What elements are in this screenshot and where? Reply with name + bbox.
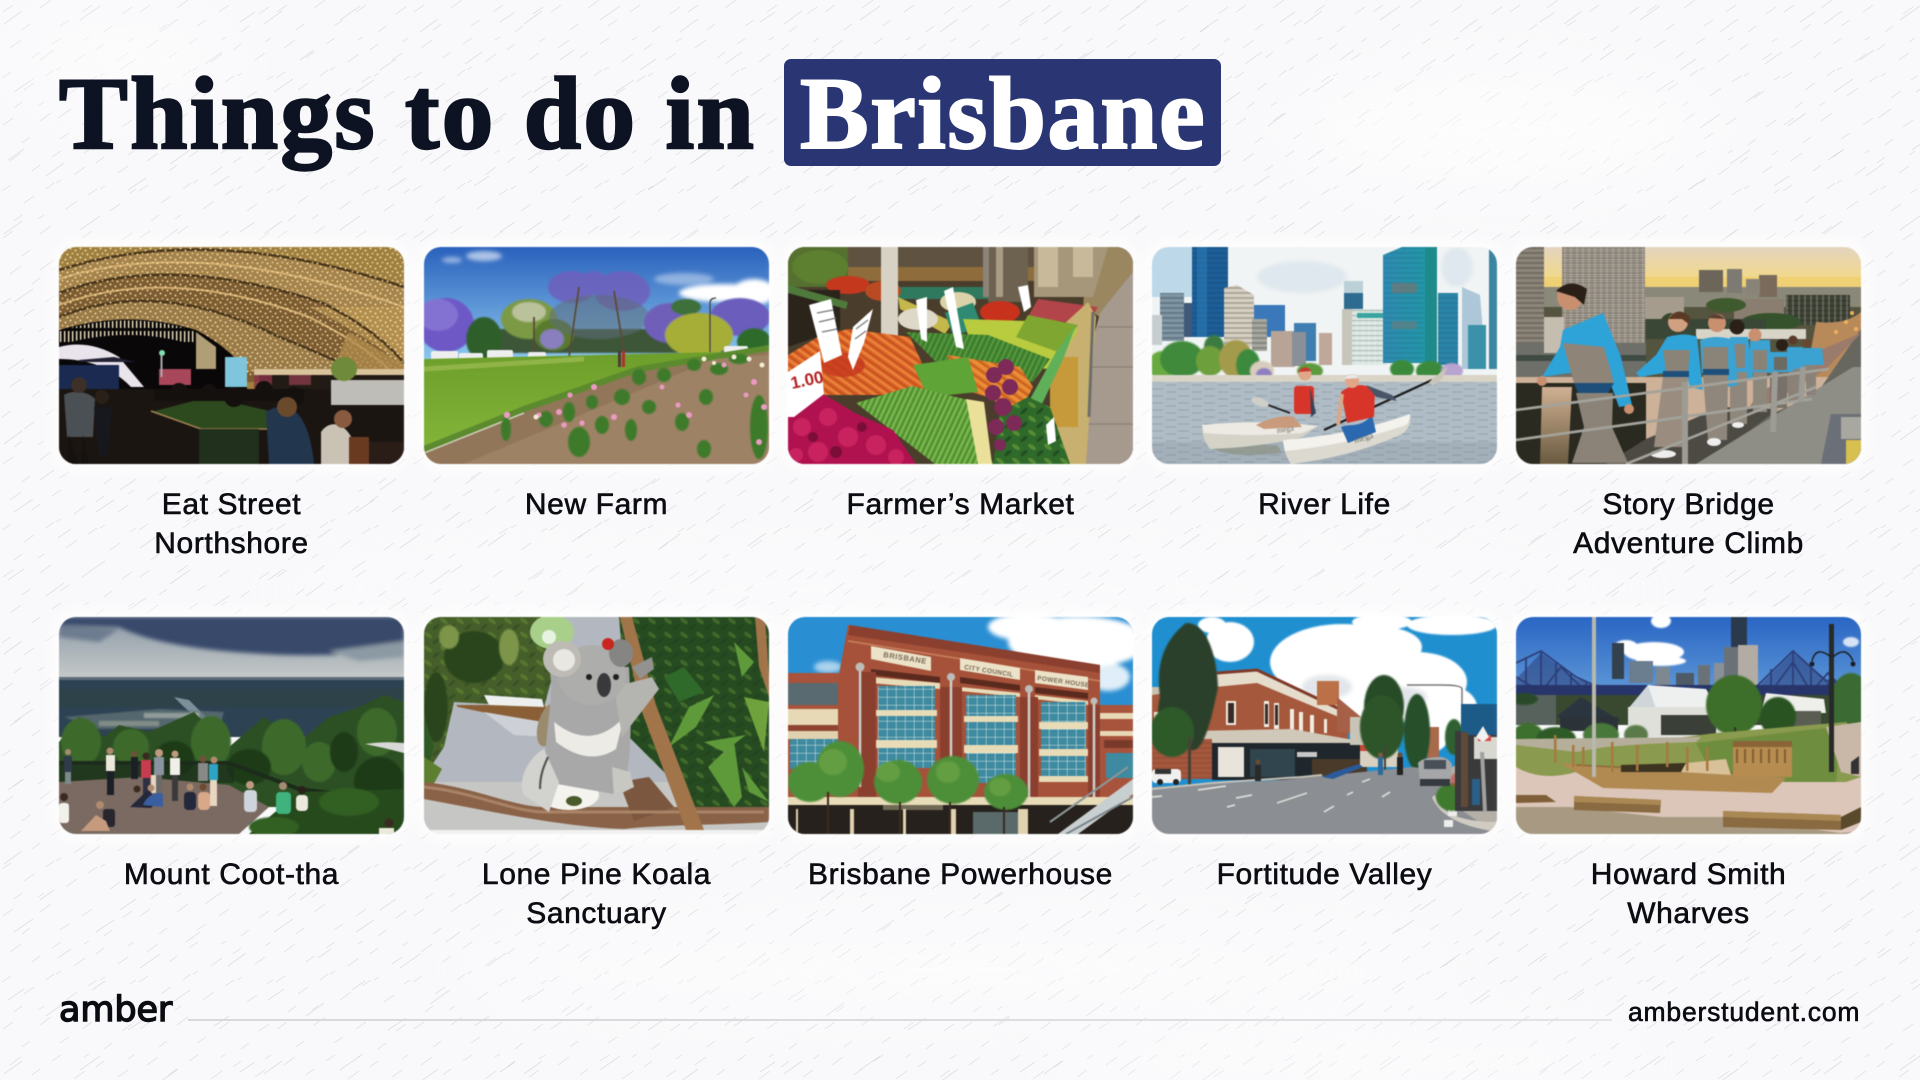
title (59, 57, 1221, 172)
panel: Eat Street Northshore (48, 236, 412, 560)
label: Howard Smith (1591, 858, 1786, 891)
photo: koala on a branch (424, 617, 769, 834)
photo: kayakers on Brisbane river with skyline (1152, 247, 1497, 464)
label: Adventure Climb (1573, 526, 1804, 560)
photo: New Farm park with jacarandas and roses (424, 247, 769, 464)
label: Farmer’s Market (847, 488, 1074, 521)
bridge truss (1516, 651, 1861, 695)
photo: kayakers on Brisbane river with skyline: mega (1353, 430, 1374, 445)
photo: Eat Street lit arches at night (59, 247, 404, 464)
label: Lone Pine Koala (482, 858, 711, 891)
footer logo: amber: amber (59, 990, 172, 1030)
photo: lookout over Brisbane from Mount Coot-tha (59, 617, 404, 834)
panel: Farmer's Market (779, 236, 1142, 521)
panel: Story Bridge Adventure Climb (1508, 235, 1872, 560)
footer website: amberstudent.com (1628, 997, 1860, 1027)
label (1591, 858, 1786, 930)
panel: Lone Pine Koala Sanctuary (415, 608, 778, 930)
photo: brick Powerhouse building: POWER HOUSE (1037, 675, 1090, 689)
label: Wharves (1627, 896, 1750, 930)
panel: Brisbane Powerhouse (779, 608, 1142, 891)
label: Brisbane Powerhouse (808, 858, 1113, 891)
photo: kayakers on Brisbane river with skyline: mega (1276, 424, 1295, 435)
label: River Life (1258, 488, 1391, 521)
photo: fresh produce market stall: 1.00 (789, 367, 825, 393)
label: Fortitude Valley (1217, 858, 1432, 891)
photo: Howard Smith Wharves park with Story Bridge (1516, 617, 1861, 834)
label: Eat Street (162, 488, 301, 521)
photo: fresh produce market stall (788, 247, 1133, 464)
label: New Farm (525, 488, 668, 521)
main facade (838, 625, 1100, 812)
panel: Howard Smith Wharves (1508, 605, 1872, 930)
panel: Fortitude Valley (1143, 608, 1506, 891)
footer divider line (188, 1019, 1612, 1021)
photo: climbers walking on Story Bridge at sunset (1516, 247, 1861, 464)
highlighted word: Brisbane: Brisbane (800, 57, 1206, 171)
label (1572, 488, 1804, 560)
photo: brick Powerhouse building (788, 617, 1133, 834)
panel: River Life (1143, 236, 1506, 521)
label: Mount Coot-tha (124, 858, 339, 891)
label: Story Bridge (1602, 488, 1775, 521)
photo: brick Powerhouse building: BRISBANE (883, 650, 928, 666)
label: Northshore (154, 526, 309, 560)
label: Sanctuary (526, 896, 667, 930)
photo: Fortitude Valley street (1152, 617, 1497, 834)
photo: brick Powerhouse building: CITY COUNCIL (964, 664, 1014, 679)
panel: Mount Coot-tha (48, 606, 412, 891)
koala (522, 639, 659, 812)
wings (788, 673, 848, 834)
label (482, 858, 711, 930)
label (154, 488, 309, 560)
small climbers (1748, 328, 1824, 412)
panel: New Farm (415, 236, 778, 521)
title: Things to do in (59, 57, 756, 171)
